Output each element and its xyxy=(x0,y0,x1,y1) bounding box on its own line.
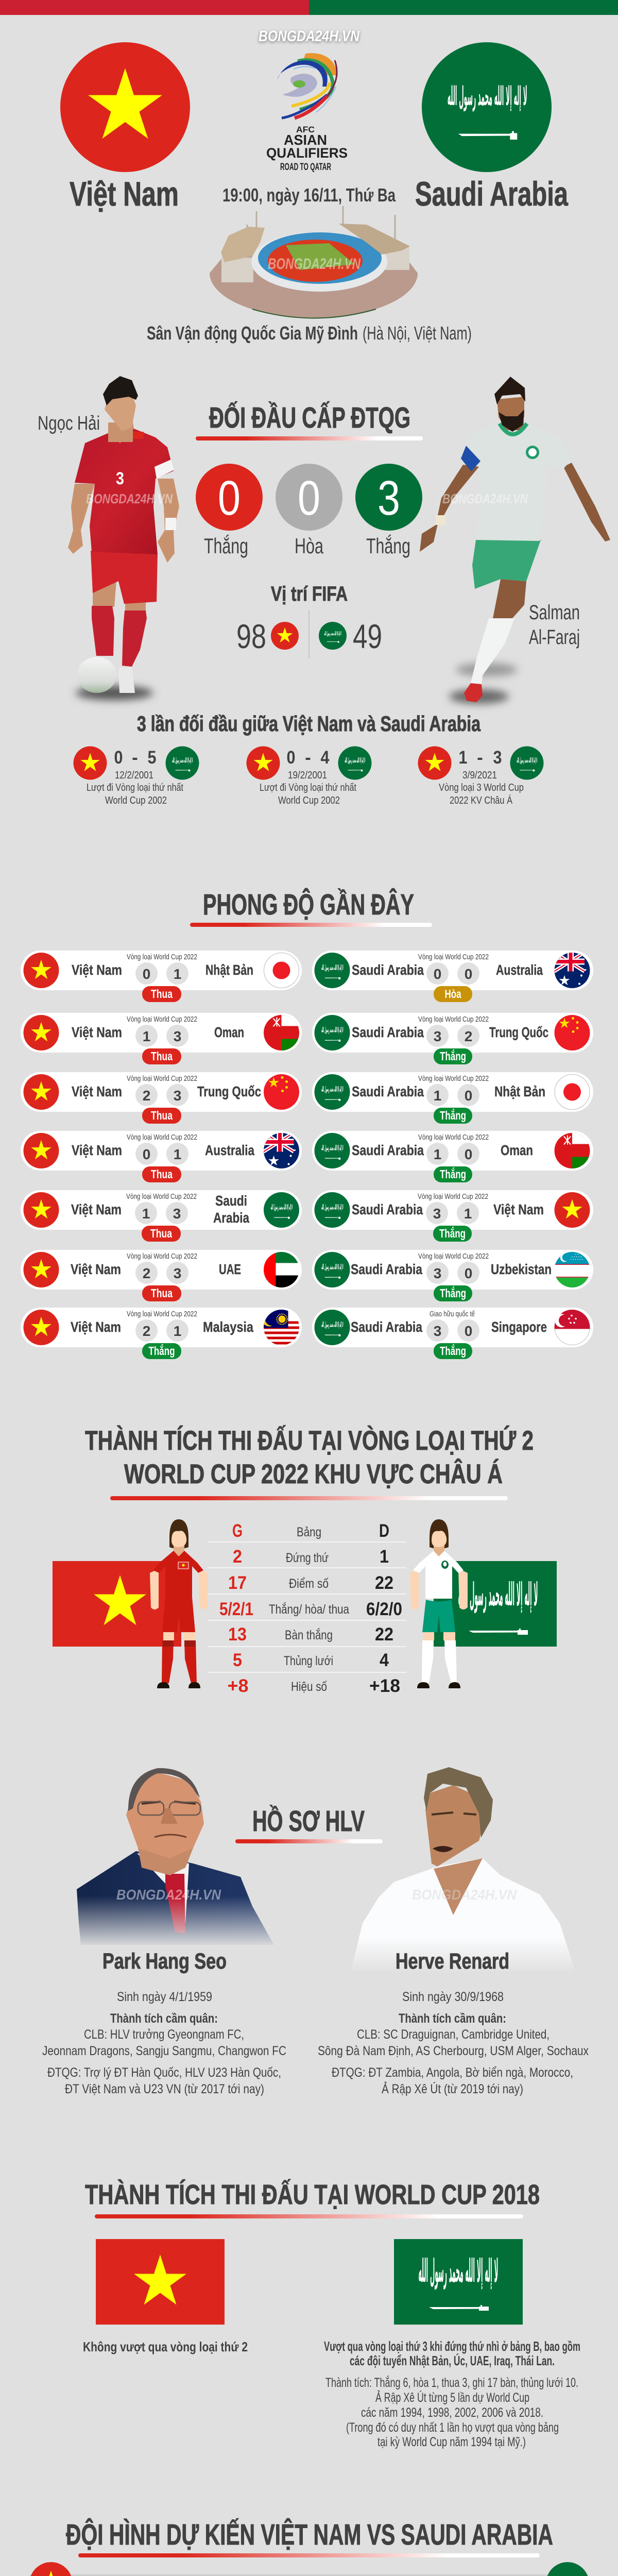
form row 1 left: Viet Nam 0-1 Japan: 1 xyxy=(174,966,181,982)
meeting 3: Vòng loại 3 World Cup xyxy=(439,782,524,793)
form row 3 left: Viet Nam 2-3 China: 3 xyxy=(174,1088,181,1104)
form row 5 right: Saudi Arabia 3-1 Viet Nam: 3 xyxy=(433,1206,441,1222)
meeting 3: 1 xyxy=(458,748,468,768)
form row 3 left: Viet Nam 2-3 China xyxy=(21,1072,302,1124)
form row 1 left: Viet Nam 0-1 Japan: Việt Nam xyxy=(72,962,122,978)
form row 1 right: Saudi Arabia 0-0 Australia: Hòa xyxy=(445,987,461,1001)
form row 5 right: Saudi Arabia 3-1 Viet Nam: Saudi Arabia xyxy=(352,1201,423,1217)
stats table: round 2 comparison: 5/2/1 xyxy=(219,1599,253,1619)
form row 5 right: Saudi Arabia 3-1 Viet Nam: لا إله إلا الله محمد رسول الله xyxy=(321,1203,344,1211)
meeting 2: 0 xyxy=(286,748,296,768)
form row 3 left: Viet Nam 2-3 China: 2 xyxy=(143,1088,150,1104)
coach profile text: Park Hang Seo: ĐTQG: Trợ lý ĐT Hàn Quốc, HLV U23 Hàn Quốc, xyxy=(47,2065,281,2080)
form row 5 left: Viet Nam 1-3 Saudi Arabia: Saudi xyxy=(215,1193,247,1209)
player: Salman Al-Faraj xyxy=(420,377,610,704)
World Cup 2018 panel: Viet Nam: Không vượt qua vòng loại thứ 2 xyxy=(83,2339,248,2354)
meeting 1: 0 xyxy=(114,748,123,768)
form row 6 right: Saudi Arabia 3-0 Uzbekistan: Saudi Arabia xyxy=(351,1261,422,1277)
pitch diagram xyxy=(30,2574,588,2576)
stats table: round 2 comparison: 1 xyxy=(380,1547,389,1567)
FIFA ranking: لا إله إلا الله محمد رسول الله xyxy=(324,630,341,637)
heading: round 2 record xyxy=(85,1425,534,1500)
form row 4 left: Viet Nam 0-1 Australia xyxy=(21,1131,302,1182)
coach profile text: Herve Renard: Ả Rập Xê Út (từ 2019 tới nay) xyxy=(382,2081,523,2096)
meeting 2 xyxy=(246,746,372,806)
stats table: round 2 comparison: 13 xyxy=(228,1624,247,1645)
portrait: Park Hang Seo: BONGDA24H.VN xyxy=(116,1887,221,1903)
stats table: round 2 comparison: 17 xyxy=(228,1573,247,1593)
form row 5 right: Saudi Arabia 3-1 Viet Nam: Thắng xyxy=(439,1226,466,1240)
form row 6 left: Viet Nam 2-3 UAE: Vòng loại World Cup 2022 xyxy=(127,1252,197,1261)
coach profile text: Herve Renard: Herve Renard xyxy=(396,1949,509,1974)
meeting 3: 3/9/2021 xyxy=(462,770,497,781)
form row 4 left: Viet Nam 0-1 Australia: 0 xyxy=(143,1146,150,1162)
form row 3 left: Viet Nam 2-3 China: Việt Nam xyxy=(72,1083,122,1099)
form row 6 left: Viet Nam 2-3 UAE: 3 xyxy=(174,1265,181,1281)
coach profile text: Park Hang Seo: CLB: HLV trưởng Gyeongnam FC, xyxy=(84,2027,244,2042)
portrait: Park Hang Seo xyxy=(72,1768,278,1947)
form row 6 left: Viet Nam 2-3 UAE: UAE xyxy=(219,1261,241,1277)
form row 5 left: Viet Nam 1-3 Saudi Arabia: Thua xyxy=(150,1227,172,1240)
form row 7 right: Saudi Arabia 3-0 Singapore: Singapore xyxy=(491,1319,547,1335)
form row 6 left: Viet Nam 2-3 UAE xyxy=(21,1250,302,1301)
portrait: Herve Renard xyxy=(345,1767,582,1973)
form row 5 right: Saudi Arabia 3-1 Viet Nam: 1 xyxy=(464,1206,472,1222)
form row 4 left: Viet Nam 0-1 Australia: 1 xyxy=(174,1146,181,1162)
form row 3 right: Saudi Arabia 1-0 Japan: Saudi Arabia xyxy=(352,1083,424,1099)
meeting 2: World Cup 2002 xyxy=(278,795,340,806)
form row 3 right: Saudi Arabia 1-0 Japan xyxy=(312,1072,593,1124)
logo: Bongda24h: BONGDA24H.VN xyxy=(259,28,360,45)
heading: head to head: ĐỐI ĐẦU CẤP ĐTQG xyxy=(209,401,410,434)
form row 2 left: Viet Nam 1-3 Oman: Oman xyxy=(214,1024,244,1040)
meeting 1: 5 xyxy=(147,748,157,768)
text: لا إله إلا الله محمد رسول الله xyxy=(271,1203,293,1211)
form row 3 right: Saudi Arabia 1-0 Japan: 0 xyxy=(465,1088,472,1104)
World Cup 2018 panel: Saudi Arabia: Ả Rập Xê Út từng 5 lần dự World Cup xyxy=(375,2389,529,2405)
form row 4 left: Viet Nam 0-1 Australia: Việt Nam xyxy=(72,1142,122,1158)
meeting 2: 4 xyxy=(320,748,330,768)
player: Ngoc Hai: 3 xyxy=(116,469,124,488)
form row 6 right: Saudi Arabia 3-0 Uzbekistan xyxy=(312,1250,593,1301)
figure: Saudi Arabia player xyxy=(410,1519,468,1688)
form row 2 right: Saudi Arabia 3-2 China: Vòng loại World Cup 2022 xyxy=(418,1015,489,1024)
head to head record: wins draws losses: Thắng xyxy=(204,534,248,558)
text: لا إله إلا الله محمد رسول الله xyxy=(345,757,365,765)
AFC Asian Qualifiers logo: QUALIFIERS xyxy=(266,145,348,161)
form row 7 left: Viet Nam 2-1 Malaysia xyxy=(21,1308,302,1359)
player label: Salman Al-Faraj: Al-Faraj xyxy=(529,626,580,649)
form row 2 right: Saudi Arabia 3-2 China: لا إله إلا الله محمد رسول الله xyxy=(321,1026,344,1034)
form row 5 left: Viet Nam 1-3 Saudi Arabia xyxy=(21,1190,302,1242)
form row 3 right: Saudi Arabia 1-0 Japan: Thắng xyxy=(440,1108,466,1122)
meeting 3: - xyxy=(477,748,483,768)
form row 3 left: Viet Nam 2-3 China: Thua xyxy=(151,1109,173,1122)
form row 6 left: Viet Nam 2-3 UAE: Thua xyxy=(151,1286,173,1300)
form row 7 right: Saudi Arabia 3-0 Singapore: Thắng xyxy=(440,1344,466,1358)
form row 4 right: Saudi Arabia 1-0 Oman: 1 xyxy=(434,1146,441,1162)
form row 1 right: Saudi Arabia 0-0 Australia: 0 xyxy=(465,966,472,982)
head to head record: wins draws losses: 0 xyxy=(298,471,320,526)
World Cup 2018 panel: Saudi Arabia xyxy=(324,2239,580,2449)
form row 1 right: Saudi Arabia 0-0 Australia: Vòng loại World Cup 2022 xyxy=(418,953,489,961)
form row 4 right: Saudi Arabia 1-0 Oman: Oman xyxy=(501,1142,533,1158)
FIFA ranking: 98 xyxy=(236,617,266,655)
form row 1 left: Viet Nam 0-1 Japan xyxy=(21,951,302,1002)
coach profile text: Park Hang Seo: Thành tích cầm quân: xyxy=(110,2011,218,2026)
form row 3 left: Viet Nam 2-3 China: Trung Quốc xyxy=(197,1083,261,1099)
stats table: round 2 comparison: 6/2/0 xyxy=(366,1599,402,1619)
stats table: round 2 comparison: 4 xyxy=(380,1650,389,1670)
meeting 2: 19/2/2001 xyxy=(288,770,327,781)
figure: Viet Nam player xyxy=(150,1519,208,1688)
meeting 1: 12/2/2001 xyxy=(115,770,153,781)
form row 7 left: Viet Nam 2-1 Malaysia: 1 xyxy=(174,1323,181,1339)
coach profile text: Herve Renard: Sinh ngày 30/9/1968 xyxy=(402,1990,504,2004)
World Cup 2018 panel: Viet Nam xyxy=(83,2239,248,2354)
form row 4 left: Viet Nam 0-1 Australia: Australia xyxy=(205,1142,254,1158)
form row 2 right: Saudi Arabia 3-2 China: Saudi Arabia xyxy=(352,1024,424,1040)
form row 7 right: Saudi Arabia 3-0 Singapore: لا إله إلا الله محمد رسول الله xyxy=(321,1320,344,1329)
form row 6 left: Viet Nam 2-3 UAE: Việt Nam xyxy=(71,1261,121,1277)
form row 7 left: Viet Nam 2-1 Malaysia: Vòng loại World Cup 2022 xyxy=(127,1310,197,1318)
form row 1 left: Viet Nam 0-1 Japan: Vòng loại World Cup 2022 xyxy=(127,953,197,961)
text: لا إله إلا الله محمد رسول الله xyxy=(172,757,193,765)
form row 1 right: Saudi Arabia 0-0 Australia: Saudi Arabia xyxy=(352,962,424,978)
meeting 3: 2022 KV Châu Á xyxy=(450,794,513,806)
form row 4 left: Viet Nam 0-1 Australia: Thua xyxy=(151,1167,173,1181)
form row 2 left: Viet Nam 1-3 Oman: Thua xyxy=(151,1049,173,1063)
coach profile text: Herve Renard: ĐTQG: ĐT Zambia, Angola, Bờ biển ngà, Morocco, xyxy=(332,2065,573,2080)
form row 2 left: Viet Nam 1-3 Oman: Việt Nam xyxy=(72,1024,122,1040)
player: Salman Al-Faraj: BONGDA24H.VN xyxy=(442,491,528,506)
coach profile text: Park Hang Seo: ĐT Việt Nam và U23 VN (từ 2017 tới nay) xyxy=(65,2082,264,2096)
stats table: round 2 comparison: Đứng thứ xyxy=(286,1551,329,1565)
form row 3 right: Saudi Arabia 1-0 Japan: 1 xyxy=(434,1088,441,1104)
meeting 2: Lượt đi Vòng loại thứ nhất xyxy=(260,782,356,793)
FIFA ranking xyxy=(236,583,382,658)
form row 6 right: Saudi Arabia 3-0 Uzbekistan: 3 xyxy=(434,1265,441,1281)
stats table: round 2 comparison: 22 xyxy=(375,1624,393,1645)
form row 4 right: Saudi Arabia 1-0 Oman: 0 xyxy=(465,1146,472,1162)
World Cup 2018 panel: Saudi Arabia: các năm 1994, 1998, 2002, 2006 và 2018. xyxy=(361,2405,543,2420)
player label: Ngoc Hai: Ngọc Hải xyxy=(38,413,100,434)
form row 4 right: Saudi Arabia 1-0 Oman xyxy=(312,1131,593,1182)
coach profile text: Herve Renard xyxy=(318,1949,589,2096)
heading: 3 meetings: 3 lần đối đầu giữa Việt Nam và Saudi Arabia xyxy=(137,711,480,736)
form row 2 left: Viet Nam 1-3 Oman xyxy=(21,1013,302,1064)
form row 7 left: Viet Nam 2-1 Malaysia: 2 xyxy=(143,1323,150,1339)
match time: 19:00, ngày 16/11, Thứ Ba xyxy=(222,184,396,206)
meeting 1: Lượt đi Vòng loại thứ nhất xyxy=(87,782,183,793)
form row 3 right: Saudi Arabia 1-0 Japan: لا إله إلا الله محمد رسول الله xyxy=(321,1085,344,1093)
stadium name: Sân Vận động Quốc Gia Mỹ Đình xyxy=(147,323,358,344)
form row 6 left: Viet Nam 2-3 UAE: 2 xyxy=(143,1265,150,1281)
stats table: round 2 comparison: +8 xyxy=(228,1676,248,1696)
form row 1 right: Saudi Arabia 0-0 Australia: Australia xyxy=(496,962,543,978)
form row 7 left: Viet Nam 2-1 Malaysia: Việt Nam xyxy=(71,1319,121,1335)
head to head record: wins draws losses: Thắng xyxy=(366,534,410,558)
coach profile text: Park Hang Seo: Park Hang Seo xyxy=(102,1949,227,1974)
form row 5 left: Viet Nam 1-3 Saudi Arabia: Arabia xyxy=(213,1210,249,1226)
coach profile text: Park Hang Seo xyxy=(42,1949,286,2096)
text: لا إله إلا الله محمد رسول الله xyxy=(517,757,537,765)
stats table: round 2 comparison: G xyxy=(232,1521,243,1541)
flag panel: Viet Nam xyxy=(53,1561,181,1647)
form row 7 right: Saudi Arabia 3-0 Singapore: 3 xyxy=(434,1323,441,1339)
form row 2 left: Viet Nam 1-3 Oman: 1 xyxy=(143,1028,150,1044)
form row 3 right: Saudi Arabia 1-0 Japan: Nhật Bản xyxy=(494,1083,545,1099)
FIFA ranking: Vị trí FIFA xyxy=(271,583,348,605)
stadium illustration xyxy=(210,206,418,318)
form row 7 left: Viet Nam 2-1 Malaysia: Thắng xyxy=(148,1344,175,1358)
coach profile text: Herve Renard: CLB: SC Draguignan, Cambridge United, xyxy=(357,2027,550,2042)
stats table: round 2 comparison: Thắng/ hòa/ thua xyxy=(269,1602,349,1617)
form row 3 left: Viet Nam 2-3 China: Vòng loại World Cup 2022 xyxy=(127,1074,197,1083)
heading: head to head xyxy=(196,401,423,440)
form row 6 right: Saudi Arabia 3-0 Uzbekistan: 0 xyxy=(465,1265,472,1281)
stats table: round 2 comparison: +18 xyxy=(369,1676,400,1696)
flag: Saudi Arabia xyxy=(422,42,552,172)
heading: recent form xyxy=(190,888,432,927)
form row 5 right: Saudi Arabia 3-1 Viet Nam: Việt Nam xyxy=(493,1201,544,1217)
World Cup 2018 panel: Saudi Arabia: tại kỳ World Cup năm 1994 tại Mỹ.) xyxy=(377,2435,526,2449)
form row 7 right: Saudi Arabia 3-0 Singapore: 0 xyxy=(465,1323,472,1339)
stats table: round 2 comparison: 5 xyxy=(233,1650,242,1670)
form row 4 left: Viet Nam 0-1 Australia: Vòng loại World Cup 2022 xyxy=(127,1133,197,1142)
AFC Asian Qualifiers logo: ROAD TO QATAR xyxy=(280,162,331,173)
form row 3 right: Saudi Arabia 1-0 Japan: Vòng loại World Cup 2022 xyxy=(418,1074,489,1083)
stats table: round 2 comparison xyxy=(208,1521,406,1696)
stats table: round 2 comparison: 22 xyxy=(375,1573,393,1593)
stadium name: (Hà Nội, Việt Nam) xyxy=(363,323,472,344)
form row 4 right: Saudi Arabia 1-0 Oman: Thắng xyxy=(440,1167,466,1181)
meeting 3: 3 xyxy=(493,748,502,768)
header colour band xyxy=(0,0,618,15)
stats table: round 2 comparison: Bảng xyxy=(297,1525,321,1539)
team name: Viet Nam: Việt Nam xyxy=(70,175,179,213)
form row 2 right: Saudi Arabia 3-2 China: Thắng xyxy=(440,1049,466,1063)
stats table: round 2 comparison: D xyxy=(379,1521,389,1541)
form row 2 left: Viet Nam 1-3 Oman: Vòng loại World Cup 2022 xyxy=(127,1015,197,1024)
form row 1 right: Saudi Arabia 0-0 Australia xyxy=(312,951,593,1002)
stadium illustration: BONGDA24H.VN xyxy=(268,256,361,273)
flag: Viet Nam xyxy=(60,42,190,172)
head to head record: wins draws losses: Hòa xyxy=(295,534,323,558)
head to head record: wins draws losses: 0 xyxy=(218,471,241,526)
form row 1 left: Viet Nam 0-1 Japan: Thua xyxy=(151,987,173,1001)
form row 6 right: Saudi Arabia 3-0 Uzbekistan: Thắng xyxy=(440,1286,466,1300)
team name: Saudi Arabia: Saudi Arabia xyxy=(415,175,569,213)
form row 4 right: Saudi Arabia 1-0 Oman: لا إله إلا الله محمد رسول الله xyxy=(321,1144,344,1152)
stats table: round 2 comparison: Điểm số xyxy=(289,1577,329,1591)
coach profile text: Herve Renard: Thành tích cầm quân: xyxy=(399,2011,506,2026)
form row 5 left: Viet Nam 1-3 Saudi Arabia: Việt Nam xyxy=(71,1201,122,1217)
form row 2 left: Viet Nam 1-3 Oman: 3 xyxy=(174,1028,181,1044)
form row 1 left: Viet Nam 0-1 Japan: 0 xyxy=(143,966,150,982)
flag panel: Saudi Arabia xyxy=(434,1561,557,1647)
coach profile text: Park Hang Seo: Sinh ngày 4/1/1959 xyxy=(117,1990,212,2004)
form row 7 left: Viet Nam 2-1 Malaysia: Malaysia xyxy=(203,1319,253,1335)
meeting 1 xyxy=(73,746,199,806)
heading: coach profile: HỒ SƠ HLV xyxy=(252,1804,365,1838)
form row 7 right: Saudi Arabia 3-0 Singapore: Giao hữu quốc tế xyxy=(430,1310,475,1318)
form row 5 left: Viet Nam 1-3 Saudi Arabia: Vòng loại World Cup 2022 xyxy=(126,1192,197,1201)
form row 6 right: Saudi Arabia 3-0 Uzbekistan: Vòng loại World Cup 2022 xyxy=(418,1252,489,1261)
heading: World Cup 2018 xyxy=(85,2179,540,2218)
form row 5 left: Viet Nam 1-3 Saudi Arabia: 3 xyxy=(173,1206,181,1222)
form row 2 right: Saudi Arabia 3-2 China xyxy=(312,1013,593,1064)
form row 5 left: Viet Nam 1-3 Saudi Arabia: 1 xyxy=(142,1206,150,1222)
player label: Salman Al-Faraj xyxy=(529,601,580,649)
heading: round 2 record: WORLD CUP 2022 KHU VỰC CHÂU Á xyxy=(124,1458,503,1489)
form row 5 right: Saudi Arabia 3-1 Viet Nam: Vòng loại World Cup 2022 xyxy=(418,1192,488,1201)
form row 2 right: Saudi Arabia 3-2 China: 3 xyxy=(434,1028,441,1044)
meeting 3 xyxy=(418,746,544,806)
stats table: round 2 comparison: Thủng lưới xyxy=(284,1654,333,1668)
stats table: round 2 comparison: Hiệu số xyxy=(291,1680,327,1694)
form row 6 right: Saudi Arabia 3-0 Uzbekistan: لا إله إلا الله محمد رسول الله xyxy=(321,1263,344,1271)
meeting 1: World Cup 2002 xyxy=(105,795,167,806)
form row 1 right: Saudi Arabia 0-0 Australia: 0 xyxy=(434,966,441,982)
pitch flag: Saudi Arabia xyxy=(546,2562,589,2576)
stats table: round 2 comparison: Bàn thắng xyxy=(285,1628,333,1642)
player: Ngoc Hai xyxy=(68,376,179,700)
form row 4 right: Saudi Arabia 1-0 Oman: Saudi Arabia xyxy=(352,1142,424,1158)
FIFA ranking: 49 xyxy=(353,617,382,655)
head to head record: wins draws losses xyxy=(196,464,422,558)
pitch flag: Viet Nam xyxy=(29,2562,73,2576)
form row 1 left: Viet Nam 0-1 Japan: Nhật Bản xyxy=(205,962,253,978)
form row 7 right: Saudi Arabia 3-0 Singapore: Saudi Arabia xyxy=(351,1319,422,1335)
player label: Salman Al-Faraj: Salman xyxy=(529,601,580,624)
form row 1 right: Saudi Arabia 0-0 Australia: لا إله إلا الله محمد رسول الله xyxy=(321,963,344,972)
AFC Asian Qualifiers logo: ASIAN xyxy=(284,132,327,148)
head to head record: wins draws losses: 3 xyxy=(377,471,400,526)
meeting 2: - xyxy=(305,748,311,768)
form row 2 right: Saudi Arabia 3-2 China: 2 xyxy=(465,1028,472,1044)
AFC Asian Qualifiers logo: AFC xyxy=(296,125,315,134)
form row 7 right: Saudi Arabia 3-0 Singapore xyxy=(312,1308,593,1359)
form row 2 right: Saudi Arabia 3-2 China: Trung Quốc xyxy=(489,1024,548,1040)
form row 5 right: Saudi Arabia 3-1 Viet Nam xyxy=(312,1190,593,1242)
stats table: round 2 comparison: 2 xyxy=(233,1547,242,1567)
heading: recent form: PHONG ĐỘ GẦN ĐÂY xyxy=(203,888,414,921)
player: Ngoc Hai: BONGDA24H.VN xyxy=(86,491,173,506)
form row 6 right: Saudi Arabia 3-0 Uzbekistan: Uzbekistan xyxy=(491,1261,552,1277)
heading: coach profile xyxy=(235,1804,383,1843)
form row 4 right: Saudi Arabia 1-0 Oman: Vòng loại World Cup 2022 xyxy=(418,1133,489,1142)
AFC Asian Qualifiers logo xyxy=(266,53,348,173)
coach profile text: Park Hang Seo: Jeonnam Dragons, Sangju Sangmu, Changwon FC xyxy=(42,2044,286,2058)
portrait: Herve Renard: BONGDA24H.VN xyxy=(412,1887,517,1903)
meeting 1: - xyxy=(132,748,138,768)
